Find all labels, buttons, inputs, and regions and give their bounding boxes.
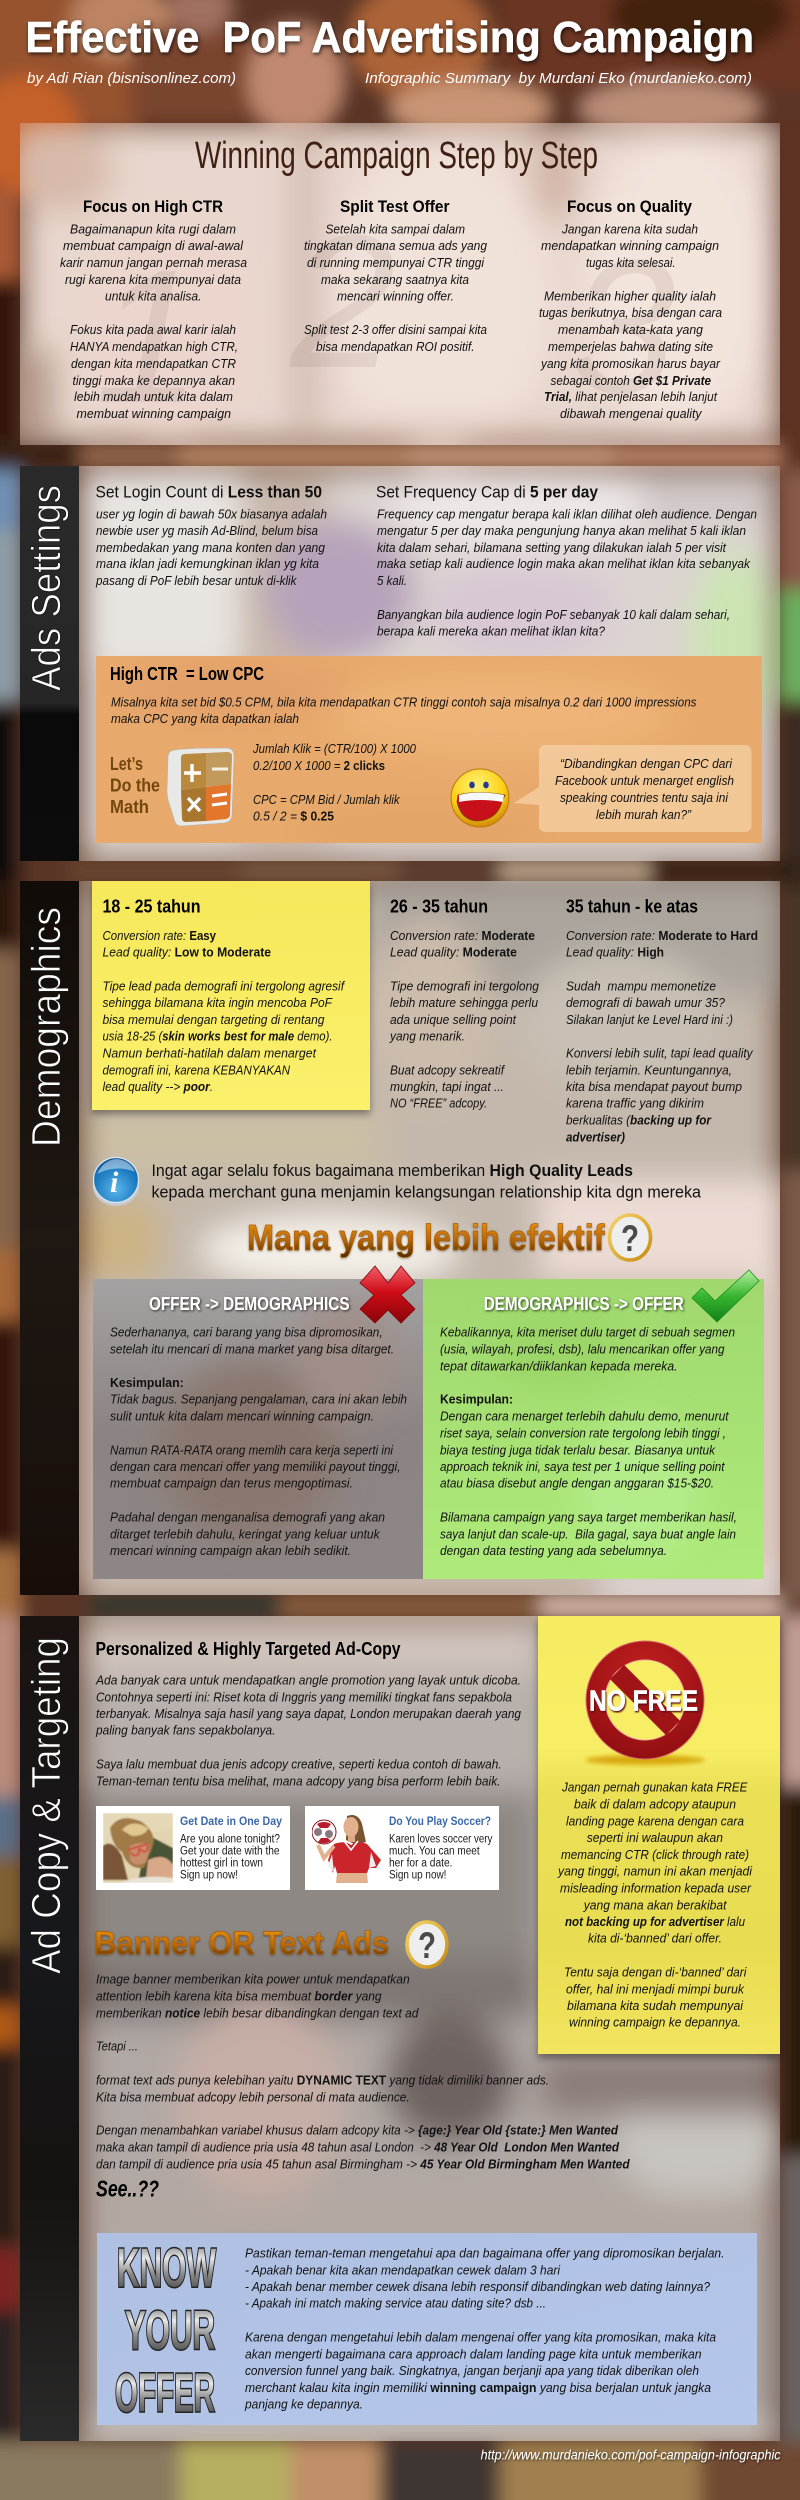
text block: banner vs text ads: Image banner memberikan kita power untuk mendapatkan	[96, 1972, 410, 1987]
let's do the math: Math	[110, 797, 149, 817]
text block: ad copy intro: Ada banyak cara untuk mendapatkan angle promotion yang layak untuk dicoba.	[95, 1672, 521, 1687]
step 1: focus on high CTR: Bagaimanapun kita rugi dalam	[70, 222, 236, 236]
ad copy: get date: Are you alone tonight?	[180, 1834, 280, 1846]
icon: laughing smiley	[451, 769, 509, 827]
icon: question mark: ?	[621, 1218, 639, 1259]
text block: ad copy intro: paling banyak fans sepakbolanya.	[95, 1723, 276, 1738]
offer text: Padahal dengan menganalisa demografi yang akan	[110, 1509, 385, 1524]
ad copy: soccer: Do You Play Soccer?	[389, 1814, 491, 1828]
know your offer text	[244, 2246, 724, 2412]
step 3: focus on quality: sebagai contoh Get $1 Private	[550, 373, 711, 388]
know your offer text: - Apakah ini match making service atau dating site? dsb ...	[245, 2296, 546, 2311]
demographics text: riset saya, selain conversion rate tergolong lebih tinggi ,	[440, 1425, 726, 1440]
warning text: memancing CTR (click through rate)	[561, 1847, 749, 1862]
step 3: focus on quality: Jangan karena kita sudah	[561, 222, 698, 236]
speech bubble	[514, 745, 752, 832]
speech bubble: “Dibandingkan dengan CPC dari	[560, 756, 733, 771]
formulas: CPC = CPM Bid / Jumlah klik	[253, 792, 401, 807]
step 3: focus on quality: Trial, lihat penjelasan lebih lanjut	[544, 389, 718, 404]
column: 26-35 tahun: Conversion rate: Moderate	[390, 928, 535, 943]
explanation: maka CPC yang kita dapatkan ialah	[111, 711, 299, 726]
know your offer text: akan mengerti bagaimana cara approach dalam landing page kita untuk memberikan	[245, 2346, 702, 2361]
warning text: seperti ini walaupun akan	[587, 1830, 723, 1845]
card: 18-25 tahun: Lead quality: Low to Moderate	[102, 945, 271, 960]
know your offer text: Pastikan teman-teman mengetahui apa dan bagaimana offer yang dipromosikan berjalan.	[245, 2246, 724, 2261]
panel: ads settings	[20, 466, 762, 861]
column: 26-35 tahun: Tipe demografi ini tergolong	[390, 978, 540, 993]
icon: info	[93, 1158, 139, 1206]
demographics text: Kesimpulan:	[440, 1392, 513, 1407]
text block: banner vs text ads: memberikan notice lebih besar dibandingkan dengan text ad	[96, 2005, 419, 2020]
card: 18-25 tahun: Tipe lead pada demografi ini tergolong agresif	[102, 978, 345, 993]
text block: frequency cap: berapa kali mereka akan melihat iklan kita?	[377, 624, 606, 639]
column: 35 tahun ke atas: Sudah mampu memonetize	[566, 978, 716, 993]
know your offer text: Karena dengan mengetahui lebih dalam mengenai offer yang kita promosikan, maka kita	[245, 2330, 716, 2345]
know your offer text: conversion funnel yang baik. Singkatnya, jangan berjanji apa yang tidak diberikan oleh	[245, 2363, 699, 2378]
text block: banner vs text ads: maka akan tampil di audience pria usia 48 tahun asal London -> 48 Year Old London Men Wanted	[96, 2140, 620, 2155]
icon: calculator	[167, 748, 234, 826]
text block: banner vs text ads: dan tampil di audience pria usia 45 tahun asal Birmingham -> 45 Year Old Birmingham Men Wanted	[96, 2156, 631, 2171]
text block: banner vs text ads: Dengan menambahkan variabel khusus dalam adcopy kita -> {age:} Year Old {state:} Men Wanted	[96, 2123, 619, 2138]
column: 35 tahun ke atas: lebih terjamin. Keuntungannya,	[566, 1062, 732, 1077]
panel: no free warning	[538, 1616, 780, 2054]
step 2: split test offer: bisa mendapatkan ROI positif.	[316, 339, 474, 354]
text block: login count: membedakan yang mana konten dan yang	[96, 540, 326, 555]
panel edge	[20, 123, 780, 445]
warning text: yang mana akan berakibat	[583, 1897, 728, 1912]
sample ad: get date in one day	[96, 1806, 290, 1890]
column: 26-35 tahun: ada unique selling point	[390, 1012, 517, 1027]
text block: banner vs text ads: attention lebih karena kita bisa membuat border yang	[96, 1989, 382, 2004]
know your offer wordmark	[115, 2237, 216, 2424]
ad photo: woman with red glasses	[103, 1813, 173, 1883]
offer text: Sederhananya, cari barang yang bisa dipromosikan,	[110, 1325, 383, 1340]
column: 26-35 tahun: Buat adcopy sekreatif	[390, 1062, 505, 1077]
demographics text: biaya testing juga tidak terlalu besar. Biasanya untuk	[440, 1442, 716, 1457]
faint step numerals	[95, 196, 676, 443]
see callout: See..??	[96, 2176, 159, 2202]
ad copy: get date: Sign up now!	[180, 1870, 238, 1882]
step 1: focus on high CTR: untuk kita analisa.	[105, 288, 202, 304]
panel: high CTR low CPC	[96, 656, 762, 855]
warning text: misleading information kepada user	[560, 1881, 752, 1896]
column: 35 tahun ke atas: Conversion rate: Moderate to Hard	[566, 928, 758, 943]
column: 35 tahun ke atas	[566, 897, 758, 1144]
text block: banner vs text ads: format text ads punya kelebihan yaitu DYNAMIC TEXT yang tidak dimiliki banner ads.	[96, 2072, 549, 2087]
card: 18-25 tahun: bisa memulai dengan targeting di rentang	[102, 1012, 325, 1027]
panel: know your offer	[97, 2233, 757, 2425]
demographics text: Bilamana campaign yang saya target memberikan hasil,	[440, 1509, 737, 1524]
step 3: focus on quality: yang kita promosikan harus bayar	[540, 356, 721, 371]
offer text: ditarget terlebih dahulu, keringat yang keluar untuk	[110, 1526, 381, 1541]
step 3: focus on quality: dibawah mengenai quality	[560, 406, 703, 421]
text block: banner vs text ads	[96, 1972, 631, 2171]
warning text: Jangan pernah gunakan kata FREE	[561, 1780, 748, 1795]
card: 18-25 tahun: sehingga bilamana kita ingin mencoba PoF	[102, 995, 333, 1010]
explanation: Misalnya kita set bid $0.5 CPM, bila kita mendapatkan CTR tinggi contoh saja misalnya 0.2 dari 1000 impressions	[111, 695, 697, 710]
text block: frequency cap: mengatur 5 per day maka pengunjung hanya akan melihat 5 kali iklan	[377, 523, 746, 538]
sidebar: demographics	[20, 881, 79, 1595]
card: 18-25 tahun: Namun berhati-hatilah dalam menarget	[102, 1045, 317, 1060]
demographics text: saya lanjut dan scale-up. Bila gagal, saya buat angle lain	[440, 1526, 736, 1541]
step 2: split test offer: tingkatan dimana semua ads yang	[304, 238, 488, 253]
reminder text	[152, 1161, 702, 1201]
text block: frequency cap: kita dalam sehari, bilamana setting yang dilakukan ialah 5 per visit	[377, 540, 727, 555]
column: 35 tahun ke atas: demografi di bawah umur 35?	[566, 995, 726, 1010]
step 1: focus on high CTR: lebih mudah untuk kita dalam	[74, 389, 233, 404]
sidebar: ad copy and targeting: Ad Copy & Targeting	[23, 1637, 69, 1974]
step 2: split test offer: Split test 2-3 offer disini sampai kita	[304, 322, 487, 337]
panel: demographics to offer	[423, 1279, 764, 1579]
offer text: dengan cara mencari offer yang memiliki payout tinggi,	[110, 1459, 400, 1474]
step 1: focus on high CTR: karir namun jangan pernah merasa	[60, 255, 247, 270]
offer text: mencari winning campaign akan lebih sedikit.	[110, 1543, 351, 1558]
column: 26-35 tahun: Lead quality: Moderate	[390, 945, 517, 960]
demographics text	[440, 1325, 737, 1558]
column: 35 tahun ke atas: advertiser)	[566, 1129, 625, 1144]
sidebar: demographics: Demographics	[23, 907, 69, 1147]
column: 35 tahun ke atas: kita bisa mendapat payout bump	[566, 1079, 742, 1094]
sidebar: ads settings	[20, 466, 79, 861]
let's do the math	[110, 754, 160, 817]
step 1: focus on high CTR: Fokus kita pada awal karir ialah	[70, 322, 236, 337]
sidebar: ad copy and targeting	[20, 1616, 79, 2441]
step 2: split test offer: mencari winning offer.	[337, 288, 454, 304]
let's do the math: Do the	[110, 776, 160, 796]
let's do the math: Let’s	[110, 754, 143, 774]
icon: info: i	[110, 1166, 119, 1199]
warning text: not backing up for advertiser lalu	[565, 1914, 745, 1929]
card: 18-25 tahun: 18 - 25 tahun	[102, 897, 200, 917]
card: 18-25 tahun: usia 18-25 (skin works best for male demo).	[102, 1029, 332, 1044]
text block: frequency cap: 5 kali.	[377, 573, 407, 588]
icon: green check	[692, 1270, 759, 1322]
text block: frequency cap: Set Frequency Cap di 5 per day	[376, 483, 598, 502]
column: 35 tahun ke atas: berkualitas (backing up for	[566, 1113, 712, 1128]
step 2: split test offer: Split Test Offer	[340, 197, 450, 216]
speech bubble: Facebook untuk menarget english	[555, 773, 734, 788]
column: 26-35 tahun: lebih mature sehingga perlu	[390, 995, 538, 1010]
offer text: Tidak bagus. Sepanjang pengalaman, cara ini akan lebih	[110, 1392, 407, 1407]
heading: offer to demographics: OFFER -> DEMOGRAPHICS	[149, 1294, 350, 1314]
warning text: baik di dalam adcopy ataupun	[574, 1797, 736, 1812]
ad copy: soccer: much. You can meet	[389, 1846, 480, 1858]
heading: banner or text ads: Banner OR Text Ads	[94, 1925, 389, 1961]
icon: no free badge	[585, 1641, 705, 1765]
sidebar: ads settings: Ads Settings	[23, 485, 69, 691]
ad copy: get date: hottest girl in town	[180, 1858, 263, 1870]
column: 26-35 tahun: yang menarik.	[389, 1029, 465, 1044]
step 3: focus on quality: mendapatkan winning campaign	[541, 238, 719, 253]
faint step numerals: 3	[570, 221, 676, 433]
explanation	[111, 695, 697, 726]
demographics text: approach teknik ini, saya test per 1 unique selling point	[440, 1459, 726, 1474]
text block: frequency cap: Frequency cap mengatur berapa kali iklan dilihat oleh audience. Dengan	[377, 506, 757, 521]
text block: banner vs text ads: Tetapi ...	[96, 2039, 138, 2054]
text block: ad copy intro: Saya lalu membuat dua jenis adcopy creative, seperti kedua contoh di bawah.	[96, 1756, 502, 1771]
know your offer wordmark: OFFER	[115, 2362, 215, 2424]
icon: question mark	[610, 1215, 650, 1260]
step 1: focus on high CTR: dengan kita mendapatkan CTR	[71, 356, 236, 371]
column: 26-35 tahun: mungkin, tapi ingat ...	[390, 1079, 504, 1094]
know your offer wordmark: KNOW	[117, 2237, 216, 2299]
demographics text: Dengan cara menarget terlebih dahulu demo, menurut	[440, 1409, 730, 1424]
text block: login count: Set Login Count di Less than 50	[96, 483, 322, 502]
demographics text: dengan data testing yang ada sebelumnya.	[440, 1543, 667, 1558]
step 3: focus on quality: tugas berikutnya, bisa dengan cara	[539, 305, 722, 320]
know your offer wordmark: YOUR	[125, 2299, 215, 2361]
step 3: focus on quality: Focus on Quality	[567, 197, 692, 216]
step 3: focus on quality: Memberikan higher quality ialah	[544, 288, 716, 304]
text block: login count: mana iklan jadi kemungkinan iklan yg kita	[96, 556, 319, 571]
step 1: focus on high CTR	[60, 197, 247, 421]
ad photo: woman with soccer ball	[312, 1815, 381, 1883]
demographics text: Kebalikannya, kita meriset dulu target di sebuah segmen	[440, 1325, 735, 1340]
heading: mana yang lebih efektif: Mana yang lebih efektif	[247, 1217, 606, 1258]
text block: ad copy intro	[95, 1672, 522, 1788]
icon: no free badge: NO FREE	[589, 1686, 698, 1718]
icon: red cross	[360, 1266, 415, 1323]
step 3: focus on quality: menambah kata-kata yang	[558, 322, 704, 337]
sample ad: do you play soccer	[305, 1806, 499, 1890]
formulas: 0.2/100 X 1000 = 2 clicks	[253, 758, 385, 773]
heading: winning campaign: Winning Campaign Step by Step	[195, 135, 598, 177]
warning text	[557, 1780, 753, 2030]
panel: demographics	[20, 881, 764, 1595]
card: 18-25 tahun	[92, 881, 370, 1110]
know your offer text: - Apakah benar member cewek disana lebih responsif dibandingkan web dating lainnya?	[245, 2279, 711, 2294]
column: 26-35 tahun: 26 - 35 tahun	[390, 897, 488, 917]
offer text	[110, 1325, 407, 1558]
ad copy: soccer: her for a date.	[389, 1858, 452, 1870]
panel: winning campaign step by step	[20, 123, 780, 445]
card: 18-25 tahun: demografi ini, karena KEBANYAKAN	[102, 1062, 291, 1077]
faint step numerals: 2	[288, 196, 396, 408]
ad copy: get date: Get Date in One Day	[180, 1814, 282, 1828]
step 1: focus on high CTR: rugi karena kita mempunyai data	[65, 272, 241, 287]
card: 18-25 tahun: lead quality --> poor.	[102, 1079, 213, 1094]
column: 35 tahun ke atas: Konversi lebih sulit, tapi lead quality	[566, 1045, 754, 1060]
panel: ad copy and targeting	[20, 1616, 780, 2441]
step 1: focus on high CTR: membuat campaign di awal-awal	[63, 238, 244, 253]
text block: login count: user yg login di bawah 50x biasanya adalah	[96, 506, 327, 521]
heading: demographics to offer: DEMOGRAPHICS -> OFFER	[484, 1294, 684, 1314]
step 2: split test offer: maka sekarang saatnya kita	[321, 272, 469, 287]
text block: frequency cap: Banyangkan bila audience login PoF sebanyak 10 kali dalam sehari,	[377, 607, 730, 622]
demographics text: atau biasa disebut angle dengan anggaran $15-$20.	[440, 1476, 714, 1491]
step 1: focus on high CTR: membuat winning campaign	[76, 406, 231, 421]
text block: banner vs text ads: Kita bisa membuat adcopy lebih personal di mata audience.	[96, 2089, 410, 2104]
speech bubble: speaking countries tentu saja ini	[560, 790, 729, 805]
text block: login count: newbie user yg masih Ad-Blind, belum bisa	[96, 523, 318, 538]
column: 35 tahun ke atas: Lead quality: High	[566, 945, 664, 960]
column: 26-35 tahun	[389, 897, 540, 1111]
formulas	[252, 741, 417, 824]
formulas: 0.5 / 2 = $ 0.25	[253, 809, 334, 824]
offer text: membuat campaign dan terus mengoptimasi.	[110, 1476, 353, 1491]
step 2: split test offer: di running mempunyai CTR tinggi	[307, 255, 485, 270]
ad copy: soccer: Karen loves soccer very	[389, 1834, 493, 1846]
warning text: winning campaign ke depannya.	[569, 2015, 741, 2030]
offer text: Kesimpulan:	[110, 1375, 184, 1390]
step 3: focus on quality: tugas kita selesai.	[586, 255, 676, 270]
demographics text: (usia, wilayah, profesi, dsb), lalu mencarikan offer yang	[440, 1342, 725, 1357]
step 2: split test offer	[304, 197, 488, 354]
warning text: Tentu saja dengan di-‘banned’ dari	[564, 1965, 747, 1980]
demographics text: tepat ditawarkan/diiklankan kepada mereka.	[440, 1358, 678, 1373]
warning text: yang tinggi, namun ini akan menjadi	[557, 1864, 753, 1879]
ad copy: soccer: Sign up now!	[389, 1870, 446, 1882]
offer text: Namun RATA-RATA orang memlih cara kerja seperti ini	[110, 1442, 394, 1457]
heading: personalized ad copy: Personalized & Highly Targeted Ad-Copy	[96, 1639, 400, 1659]
panel: offer to demographics	[93, 1279, 423, 1579]
step 1: focus on high CTR: Focus on High CTR	[83, 197, 223, 216]
speech bubble: lebih murah kan?”	[596, 807, 692, 822]
column: 26-35 tahun: NO “FREE” adcopy.	[390, 1096, 487, 1111]
warning text: kita di-‘banned’ dari offer.	[588, 1931, 722, 1946]
warning text: landing page karena dengan cara	[566, 1813, 744, 1828]
text block: login count: pasang di PoF lebih besar untuk di-klik	[95, 573, 298, 588]
text block: login count	[95, 483, 327, 588]
byline: infographic summary: Infographic Summary by Murdani Eko (murdanieko.com)	[365, 70, 752, 87]
formulas: Jumlah Klik = (CTR/100) X 1000	[252, 741, 417, 756]
title: Effective PoF Advertising Campaign	[26, 13, 754, 62]
card: 18-25 tahun: Conversion rate: Easy	[102, 928, 217, 943]
column: 35 tahun ke atas: karena traffic yang dikirim	[566, 1096, 704, 1111]
step 1: focus on high CTR: HANYA mendapatkan high CTR,	[70, 339, 238, 354]
warning text: bilamana kita sudah mempunyai	[567, 1998, 744, 2013]
reminder text: Ingat agar selalu fokus bagaimana memberikan High Quality Leads	[152, 1161, 633, 1180]
reminder text: kepada merchant guna menjamin kelangsungan relationship kita dgn mereka	[152, 1182, 702, 1201]
icon: question mark: ?	[418, 1925, 436, 1966]
offer text: setelah itu mencari di mana market yang bisa ditarget.	[110, 1342, 394, 1357]
icon: question mark	[407, 1922, 447, 1967]
text block: ad copy intro: Contohnya seperti ini: Riset kota di Inggris yang memiliki tingkat fans sepakbola	[96, 1689, 512, 1704]
text block: ad copy intro: Teman-teman tentu bisa melihat, mana adcopy yang bisa perform lebih baik.	[96, 1773, 500, 1788]
warning text: offer, hal ini menjadi mimpi buruk	[566, 1981, 745, 1996]
text block: ad copy intro: terbanyak. Misalnya saja hasil yang saya dapat, London merupakan daerah yang	[96, 1706, 522, 1721]
step 3: focus on quality: memperjelas bahwa dating site	[548, 339, 713, 354]
know your offer text: merchant kalau kita ingin memiliki winning campaign yang bisa berjalan untuk jangka	[245, 2380, 711, 2395]
step 3: focus on quality	[539, 197, 722, 421]
byline: author: by Adi Rian (bisnisonlinez.com)	[27, 70, 236, 87]
know your offer text: panjang ke depannya.	[244, 2397, 363, 2412]
column: 35 tahun ke atas: Silakan lanjut ke Level Hard ini :)	[566, 1012, 733, 1027]
text block: frequency cap	[376, 483, 757, 639]
know your offer text: - Apakah benar kita akan mendapatkan cewek dalam 3 hari	[245, 2262, 561, 2277]
step 2: split test offer: Setelah kita sampai dalam	[326, 222, 465, 236]
ad copy: get date: Get your date with the	[180, 1846, 280, 1858]
step 1: focus on high CTR: tinggi maka ke depannya akan	[72, 373, 235, 388]
ad copy: soccer	[389, 1814, 493, 1882]
text block: frequency cap: maka setiap kali audience login maka akan melihat iklan kita sebanyak	[377, 556, 751, 571]
faint step numerals: 1	[95, 231, 201, 443]
column: 35 tahun ke atas: 35 tahun - ke atas	[566, 897, 698, 917]
offer text: sulit untuk kita dalam mencari winning campaign.	[110, 1409, 374, 1424]
ad copy: get date	[180, 1814, 282, 1882]
heading: high CTR equals low CPC: High CTR = Low CPC	[110, 664, 264, 684]
